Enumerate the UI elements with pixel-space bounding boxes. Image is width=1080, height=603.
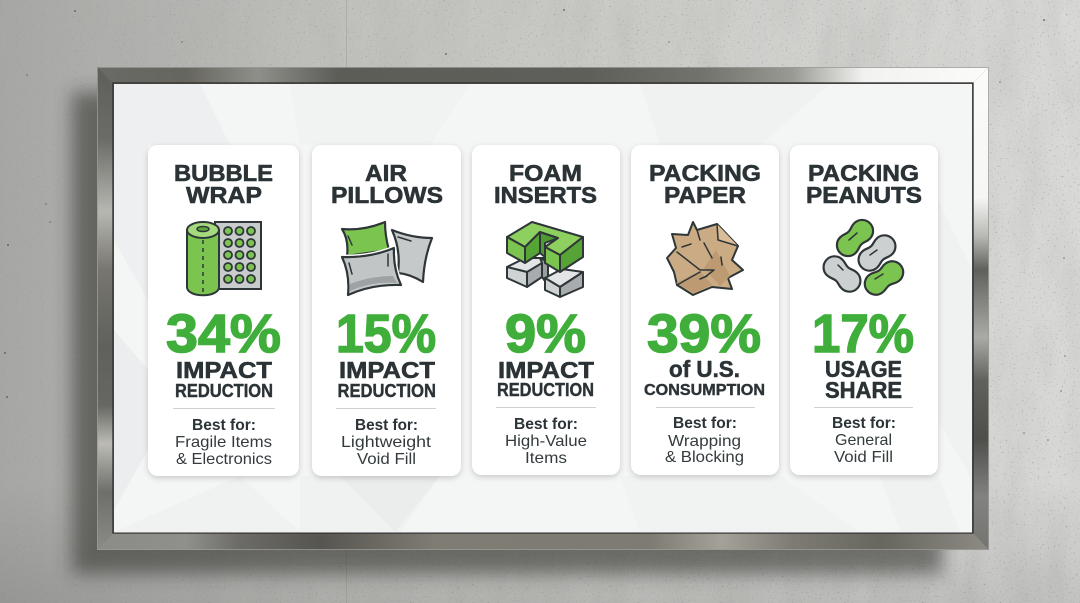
- stat: 15%: [336, 304, 436, 364]
- stat: 9%: [505, 304, 586, 364]
- stat label: SHARE: [825, 377, 902, 403]
- stat label: CONSUMPTION: [644, 382, 765, 399]
- heading: FOAM: [509, 160, 582, 186]
- icon: pillows: [342, 222, 432, 295]
- best for: [665, 415, 744, 466]
- icon: peanuts: [819, 215, 908, 299]
- white display panel with faint facets: [114, 84, 972, 532]
- stat label: USAGE: [825, 356, 902, 382]
- metal frame: [97, 67, 989, 550]
- best for: [505, 416, 587, 467]
- stat label: [497, 357, 594, 400]
- best for: Fragile Items: [175, 434, 272, 451]
- heading: PACKING: [808, 160, 919, 186]
- best for: Best for:: [355, 417, 418, 434]
- stat label: REDUCTION: [497, 380, 594, 400]
- stat label: [175, 357, 273, 401]
- stat label: of U.S.: [669, 356, 740, 382]
- best for: [175, 417, 272, 468]
- best for: & Electronics: [176, 451, 272, 468]
- best for: Best for:: [673, 415, 737, 432]
- heading: BUBBLE: [174, 160, 273, 186]
- best for: Best for:: [832, 415, 896, 432]
- stat: 39%: [647, 304, 761, 364]
- stat: 34%: [166, 304, 281, 364]
- card: packing peanuts: [790, 145, 938, 475]
- heading: PACKING: [649, 160, 761, 186]
- stat label: [644, 356, 765, 399]
- best for: Best for:: [192, 417, 256, 434]
- stat label: [825, 356, 902, 403]
- heading: [649, 160, 761, 208]
- best for: & Blocking: [665, 449, 744, 466]
- best for: Lightweight: [341, 434, 432, 451]
- stat label: IMPACT: [498, 357, 594, 383]
- icon: bubble wrap roll: [187, 222, 261, 295]
- card: bubble wrap: [148, 145, 299, 476]
- heading: [331, 160, 443, 208]
- stat label: REDUCTION: [338, 381, 436, 401]
- best for: Wrapping: [668, 433, 741, 450]
- stat label: IMPACT: [176, 357, 272, 383]
- best for: High-Value: [505, 433, 587, 450]
- stat label: IMPACT: [339, 357, 435, 383]
- card: foam inserts: [472, 145, 620, 475]
- heading: PAPER: [664, 182, 746, 208]
- best for: [832, 415, 896, 466]
- best for: General: [835, 432, 892, 449]
- stat label: REDUCTION: [175, 381, 273, 401]
- heading: [806, 160, 922, 208]
- heading: AIR: [365, 160, 407, 186]
- card: air pillows: [312, 145, 461, 476]
- best for: Void Fill: [357, 451, 416, 468]
- frame shadow on wall: [72, 92, 942, 574]
- heading: WRAP: [186, 182, 262, 208]
- best for: Void Fill: [834, 449, 893, 466]
- best for: [341, 417, 432, 468]
- card: packing paper: [631, 145, 779, 475]
- best for: Items: [525, 450, 567, 467]
- stat: 17%: [812, 304, 914, 364]
- heading: PEANUTS: [806, 182, 922, 208]
- heading: INSERTS: [494, 182, 597, 208]
- icon: crumpled paper: [667, 222, 743, 295]
- heading: [494, 160, 597, 208]
- icon: foam blocks: [507, 222, 583, 297]
- heading: PILLOWS: [331, 182, 443, 208]
- heading: [174, 160, 273, 208]
- stat label: [338, 357, 436, 401]
- best for: Best for:: [514, 416, 578, 433]
